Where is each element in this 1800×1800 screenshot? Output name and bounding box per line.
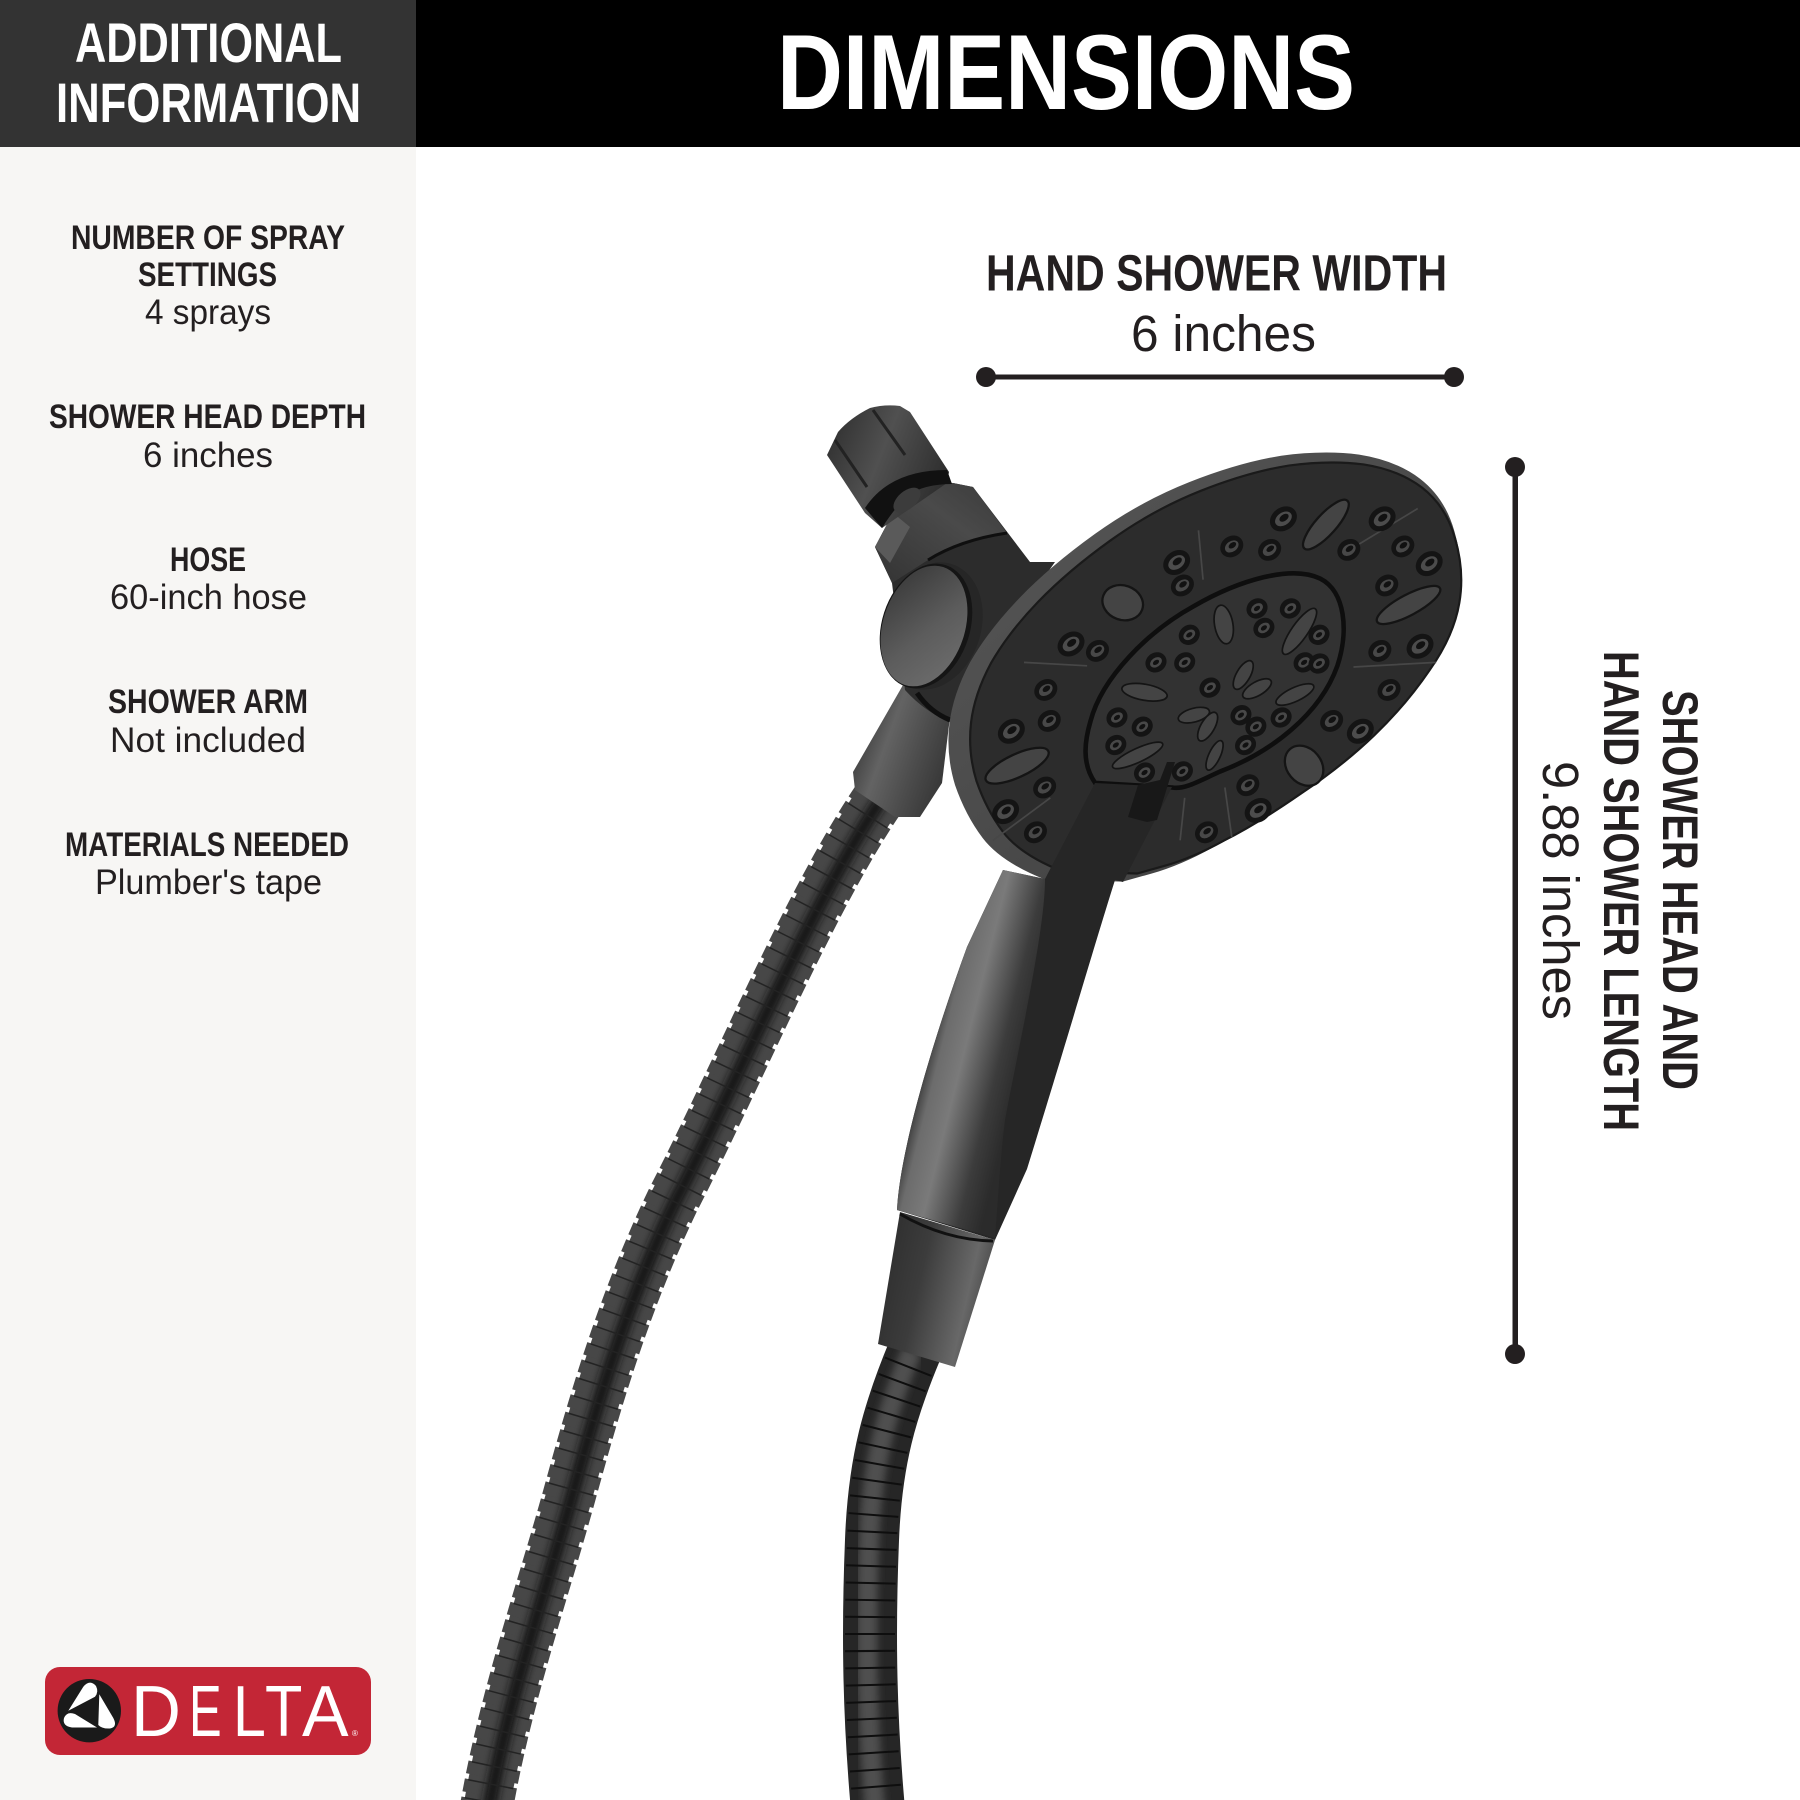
wordmark: DELTA: E bbox=[189, 1672, 222, 1752]
face spokes bbox=[993, 509, 1436, 840]
header: additional information: INFORMATION bbox=[56, 71, 361, 134]
spec: shower arm: Not included bbox=[110, 721, 306, 760]
threaded nut bbox=[827, 405, 952, 528]
spec: hose bbox=[110, 541, 307, 617]
hose: right bbox=[867, 1350, 915, 1800]
dimension: hand shower width bbox=[976, 244, 1464, 387]
arrow: width dimension line bbox=[976, 367, 1464, 387]
header: additional information bbox=[0, 0, 416, 147]
inner spray disc bbox=[1086, 573, 1344, 788]
header: dimensions title: DIMENSIONS bbox=[777, 12, 1355, 132]
spec: shower arm: SHOWER ARM bbox=[108, 683, 308, 721]
panel: additional information sidebar bbox=[0, 147, 416, 1800]
wordmark: DELTA: D bbox=[131, 1671, 181, 1751]
icon: delta triangle mark bbox=[58, 1679, 121, 1742]
wordmark: DELTA: T bbox=[265, 1672, 302, 1752]
dimension: hand shower width: HAND SHOWER WIDTH bbox=[986, 244, 1447, 302]
spec: number of spray settings bbox=[71, 219, 345, 332]
handle bbox=[878, 762, 1175, 1367]
outer rim bbox=[948, 453, 1461, 882]
outer teardrop nozzles bbox=[981, 494, 1445, 793]
dimension: shower head and hand shower length bbox=[1532, 651, 1708, 1131]
product image: shower head bbox=[486, 405, 1461, 1800]
wordmark: DELTA: L bbox=[233, 1670, 266, 1751]
spec: materials needed: Plumber's tape bbox=[95, 863, 322, 902]
dimension: shower head and hand shower length: 9.88 inches bbox=[1532, 761, 1589, 1020]
spec: materials needed: MATERIALS NEEDED bbox=[65, 826, 349, 864]
shower arm mount bbox=[827, 405, 1055, 817]
swivel cap bbox=[875, 483, 1007, 583]
trigger tab bbox=[1128, 762, 1175, 822]
swivel body bbox=[875, 483, 1055, 722]
wordmark: DELTA bbox=[131, 1670, 358, 1752]
round button bbox=[866, 554, 982, 698]
lower arm bbox=[853, 685, 950, 817]
spec: number of spray settings: SETTINGS bbox=[138, 256, 277, 294]
handle body bbox=[897, 783, 1172, 1240]
wordmark: DELTA: A bbox=[302, 1672, 349, 1752]
spec: shower arm bbox=[108, 683, 308, 760]
button ring edge bbox=[864, 552, 988, 700]
header: additional information: ADDITIONAL bbox=[75, 11, 342, 74]
arc seam bbox=[928, 533, 1007, 560]
black arc bbox=[917, 693, 950, 720]
hose: left bbox=[486, 800, 881, 1800]
hose collar bbox=[878, 1212, 995, 1367]
logo: delta bbox=[45, 1667, 371, 1755]
dimension: shower head and hand shower length: SHOWER HEAD AND bbox=[1652, 690, 1708, 1090]
head bbox=[948, 453, 1461, 882]
button ring bbox=[865, 549, 999, 703]
collar seam bbox=[900, 1214, 993, 1241]
face plate bbox=[970, 462, 1461, 874]
inner teardrop nozzles bbox=[1110, 604, 1322, 773]
spec: number of spray settings: NUMBER OF SPRAY bbox=[71, 219, 345, 257]
spec: shower head depth: SHOWER HEAD DEPTH bbox=[49, 398, 366, 436]
handle lit side bbox=[897, 870, 1045, 1238]
round nozzles bbox=[987, 501, 1448, 848]
spec: materials needed bbox=[65, 826, 349, 902]
spec: hose: HOSE bbox=[170, 541, 246, 579]
wordmark: DELTA: ® bbox=[352, 1729, 358, 1738]
dimension: hand shower width: 6 inches bbox=[1131, 305, 1316, 362]
header: dimensions title bbox=[416, 0, 1800, 147]
spec: hose: 60-inch hose bbox=[110, 578, 307, 617]
spec: shower head depth: 6 inches bbox=[143, 436, 273, 475]
spec: number of spray settings: 4 sprays bbox=[145, 293, 271, 332]
hex flat bbox=[875, 513, 910, 563]
dimension: shower head and hand shower length: HAND SHOWER LENGTH bbox=[1593, 651, 1649, 1131]
arrow: length dimension line bbox=[1505, 457, 1525, 1364]
spec: shower head depth bbox=[49, 398, 366, 475]
